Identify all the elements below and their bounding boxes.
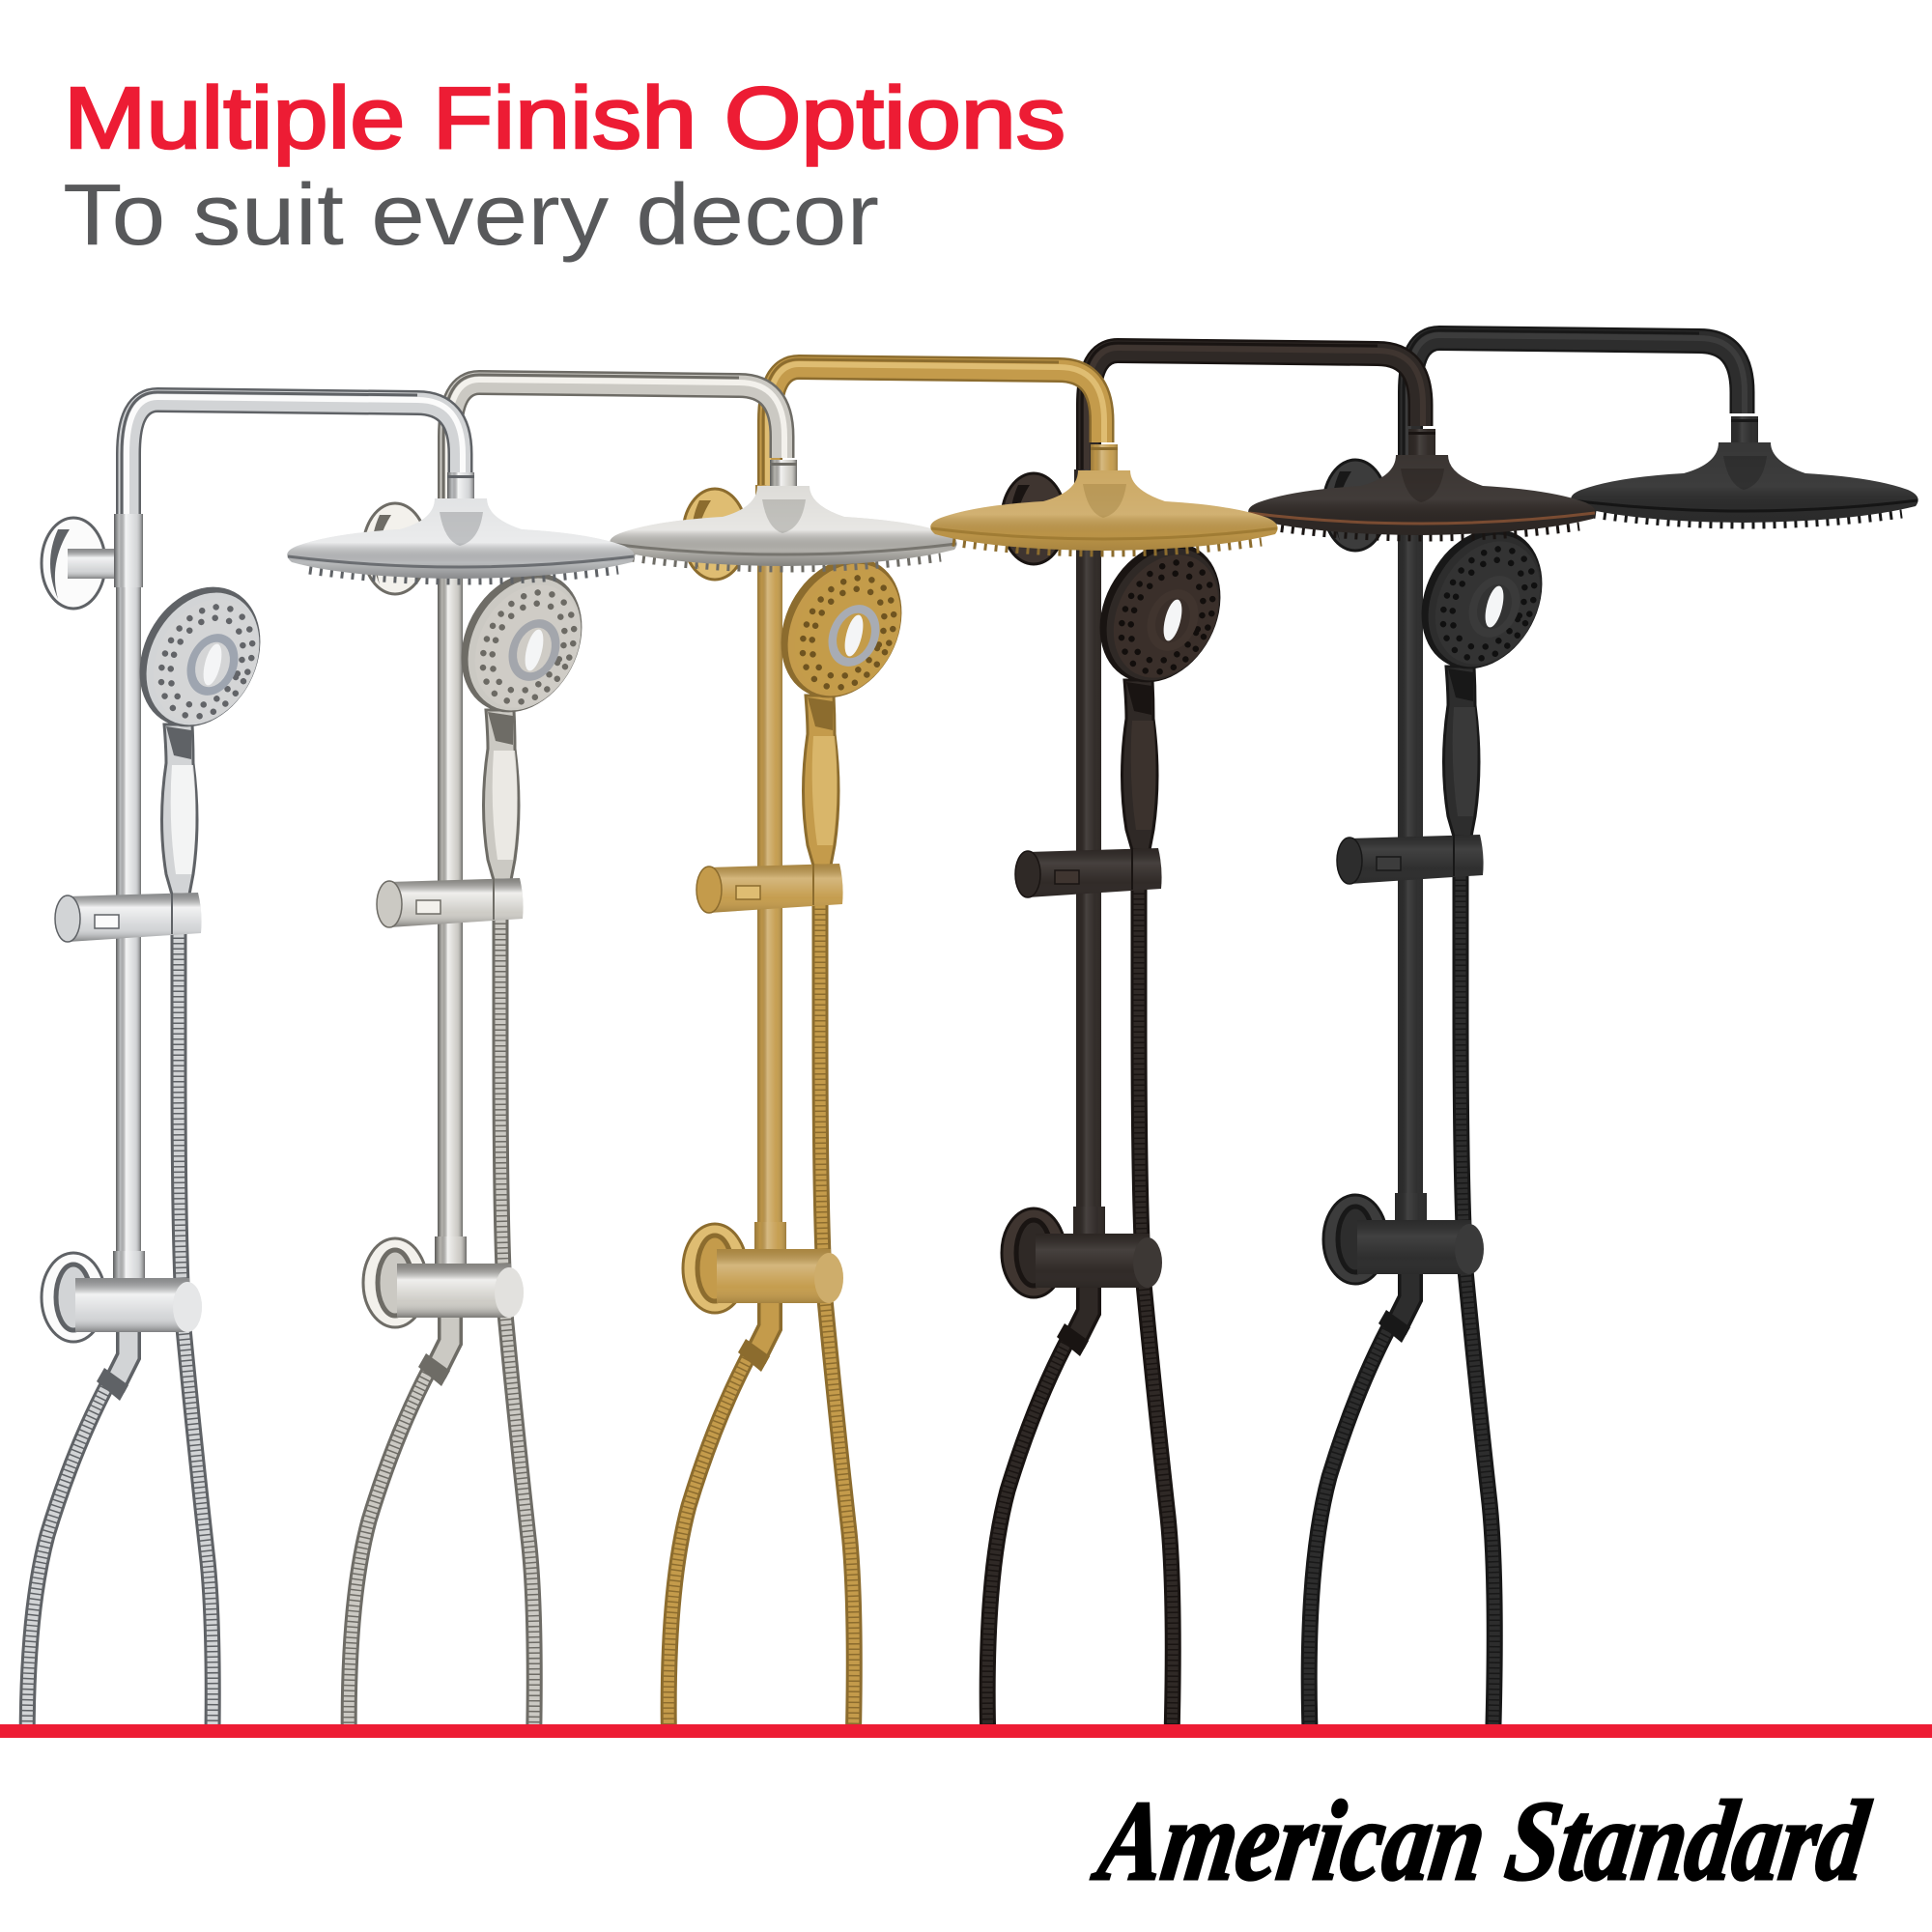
matte black rain head xyxy=(1571,416,1918,525)
heading: multiple finish options: Multiple Finish Options xyxy=(64,71,1065,167)
bronze arm xyxy=(1082,343,1423,550)
gold rail and handheld xyxy=(668,485,925,1787)
shower unit: polished chrome xyxy=(27,392,635,1816)
chrome arm xyxy=(122,392,463,599)
shower unit: brushed gold xyxy=(668,359,1104,1787)
nickel rail and handheld xyxy=(349,499,606,1802)
nickel arm xyxy=(443,375,784,582)
gold rain head xyxy=(930,444,1278,553)
title xyxy=(63,71,1065,264)
nickel rain head xyxy=(610,460,957,568)
subheading: to suit every decor: To suit every decor xyxy=(63,167,879,264)
bronze rain head xyxy=(1248,429,1596,537)
shower unit: brushed nickel xyxy=(349,375,957,1802)
bronze rail and handheld xyxy=(987,469,1244,1772)
chrome rain head xyxy=(287,472,635,581)
shower unit: oil-rubbed bronze xyxy=(987,343,1596,1772)
shower unit: matte black xyxy=(1309,330,1918,1758)
gold arm xyxy=(763,359,1104,566)
matte black rail and handheld xyxy=(1309,456,1566,1758)
red divider bar xyxy=(0,1724,1932,1738)
matte black arm xyxy=(1404,330,1745,537)
chrome rail and handheld xyxy=(27,514,284,1816)
